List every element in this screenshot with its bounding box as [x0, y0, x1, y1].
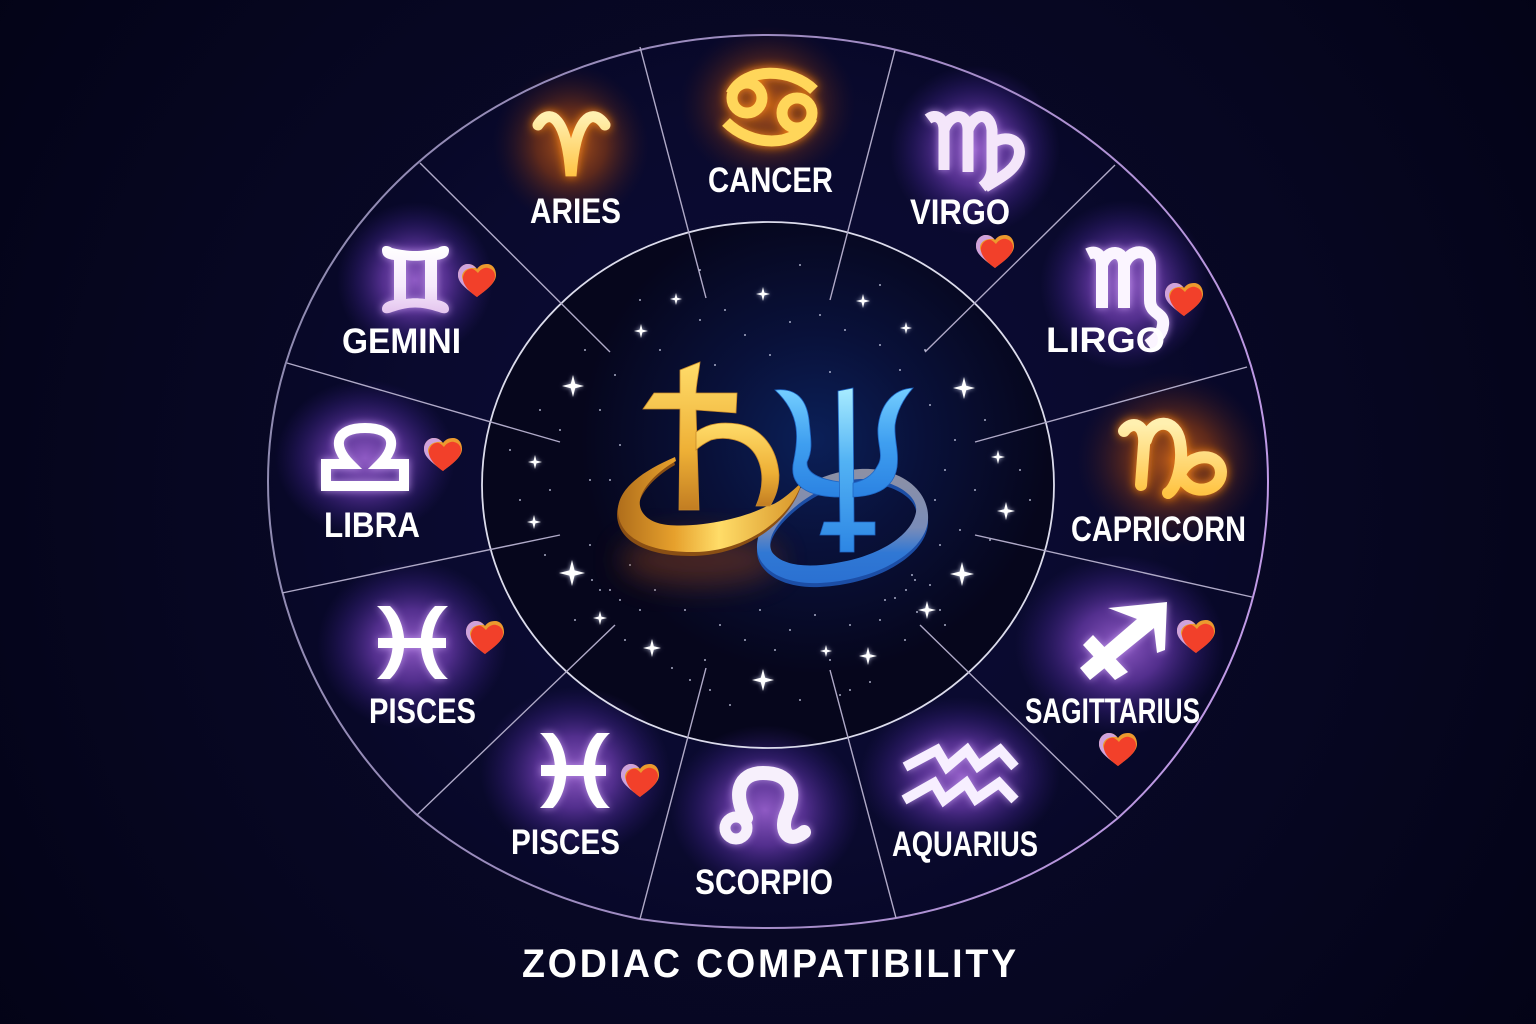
- sign: sagittarius: [1025, 602, 1215, 766]
- cancer icon: [726, 73, 814, 141]
- gemini label: GEMINI: [342, 322, 461, 361]
- sparkles: [527, 287, 1015, 691]
- aquarius label: AQUARIUS: [892, 825, 1038, 864]
- sign: scorpio: [695, 773, 833, 902]
- saturn orbit ring: [617, 457, 802, 556]
- sign: cancer: [708, 73, 833, 200]
- saturn upright and crossbar: [643, 362, 737, 510]
- aquarius icon: [904, 750, 1015, 800]
- scorpio icon: [725, 773, 804, 839]
- sector glows: [275, 25, 1267, 895]
- wheel outer disc: [268, 35, 1268, 928]
- pisces upper heart: [466, 621, 504, 654]
- sign: gemini: [342, 246, 496, 361]
- left prong: [775, 390, 840, 497]
- sector dividers: [282, 47, 1252, 919]
- aries icon: [538, 117, 605, 176]
- inner circle panel: [482, 222, 1054, 748]
- sagittarius heart bottom: [1099, 733, 1137, 766]
- cancer label: CANCER: [708, 161, 833, 200]
- neptune trident: [775, 388, 913, 552]
- scorpio label: SCORPIO: [695, 863, 833, 902]
- lirgo label: LIRGO: [1046, 321, 1165, 360]
- aries label: ARIES: [530, 192, 621, 231]
- gemini heart: [458, 264, 496, 297]
- sagittarius heart top: [1177, 620, 1215, 653]
- lirgo icon: [1088, 252, 1163, 345]
- centre symbols: [617, 362, 928, 587]
- centre shaft: [820, 388, 875, 552]
- virgo icon: [928, 116, 1019, 187]
- saturn hook: [696, 423, 779, 506]
- saturn glyph: [643, 362, 779, 510]
- sagittarius icon: [1080, 602, 1167, 680]
- neptune orbit ring: [757, 469, 928, 587]
- sign: libra: [324, 428, 462, 545]
- virgo label: VIRGO: [910, 193, 1010, 232]
- tiny stars: [510, 265, 1030, 705]
- pisces lower icon: [540, 733, 610, 808]
- sign: pisces lower: [511, 733, 659, 862]
- wheel rings: [268, 35, 1268, 928]
- sign: virgo: [910, 116, 1019, 268]
- right prong: [853, 388, 913, 497]
- sign: aries: [530, 117, 621, 231]
- capricorn icon: [1124, 424, 1221, 493]
- title: ZODIAC COMPATIBILITY: [522, 942, 1019, 986]
- zodiac wheel: [268, 25, 1268, 928]
- sign: lirgo: [1046, 252, 1203, 360]
- lirgo heart: [1165, 283, 1203, 316]
- virgo heart: [976, 235, 1014, 268]
- libra icon: [326, 428, 404, 486]
- capricorn label: CAPRICORN: [1071, 510, 1246, 549]
- centre glow: [620, 534, 780, 586]
- starfield: [510, 265, 1030, 705]
- sign: pisces upper: [369, 606, 504, 731]
- libra heart: [424, 438, 462, 471]
- sagittarius label: SAGITTARIUS: [1025, 692, 1200, 731]
- libra label: LIBRA: [324, 506, 420, 545]
- pisces upper icon: [377, 606, 448, 679]
- pisces lower heart: [621, 764, 659, 797]
- pisces lower label: PISCES: [511, 823, 620, 862]
- sign: aquarius: [892, 750, 1038, 864]
- sign: capricorn: [1071, 424, 1246, 549]
- gemini icon: [382, 246, 449, 313]
- pisces upper label: PISCES: [369, 692, 476, 731]
